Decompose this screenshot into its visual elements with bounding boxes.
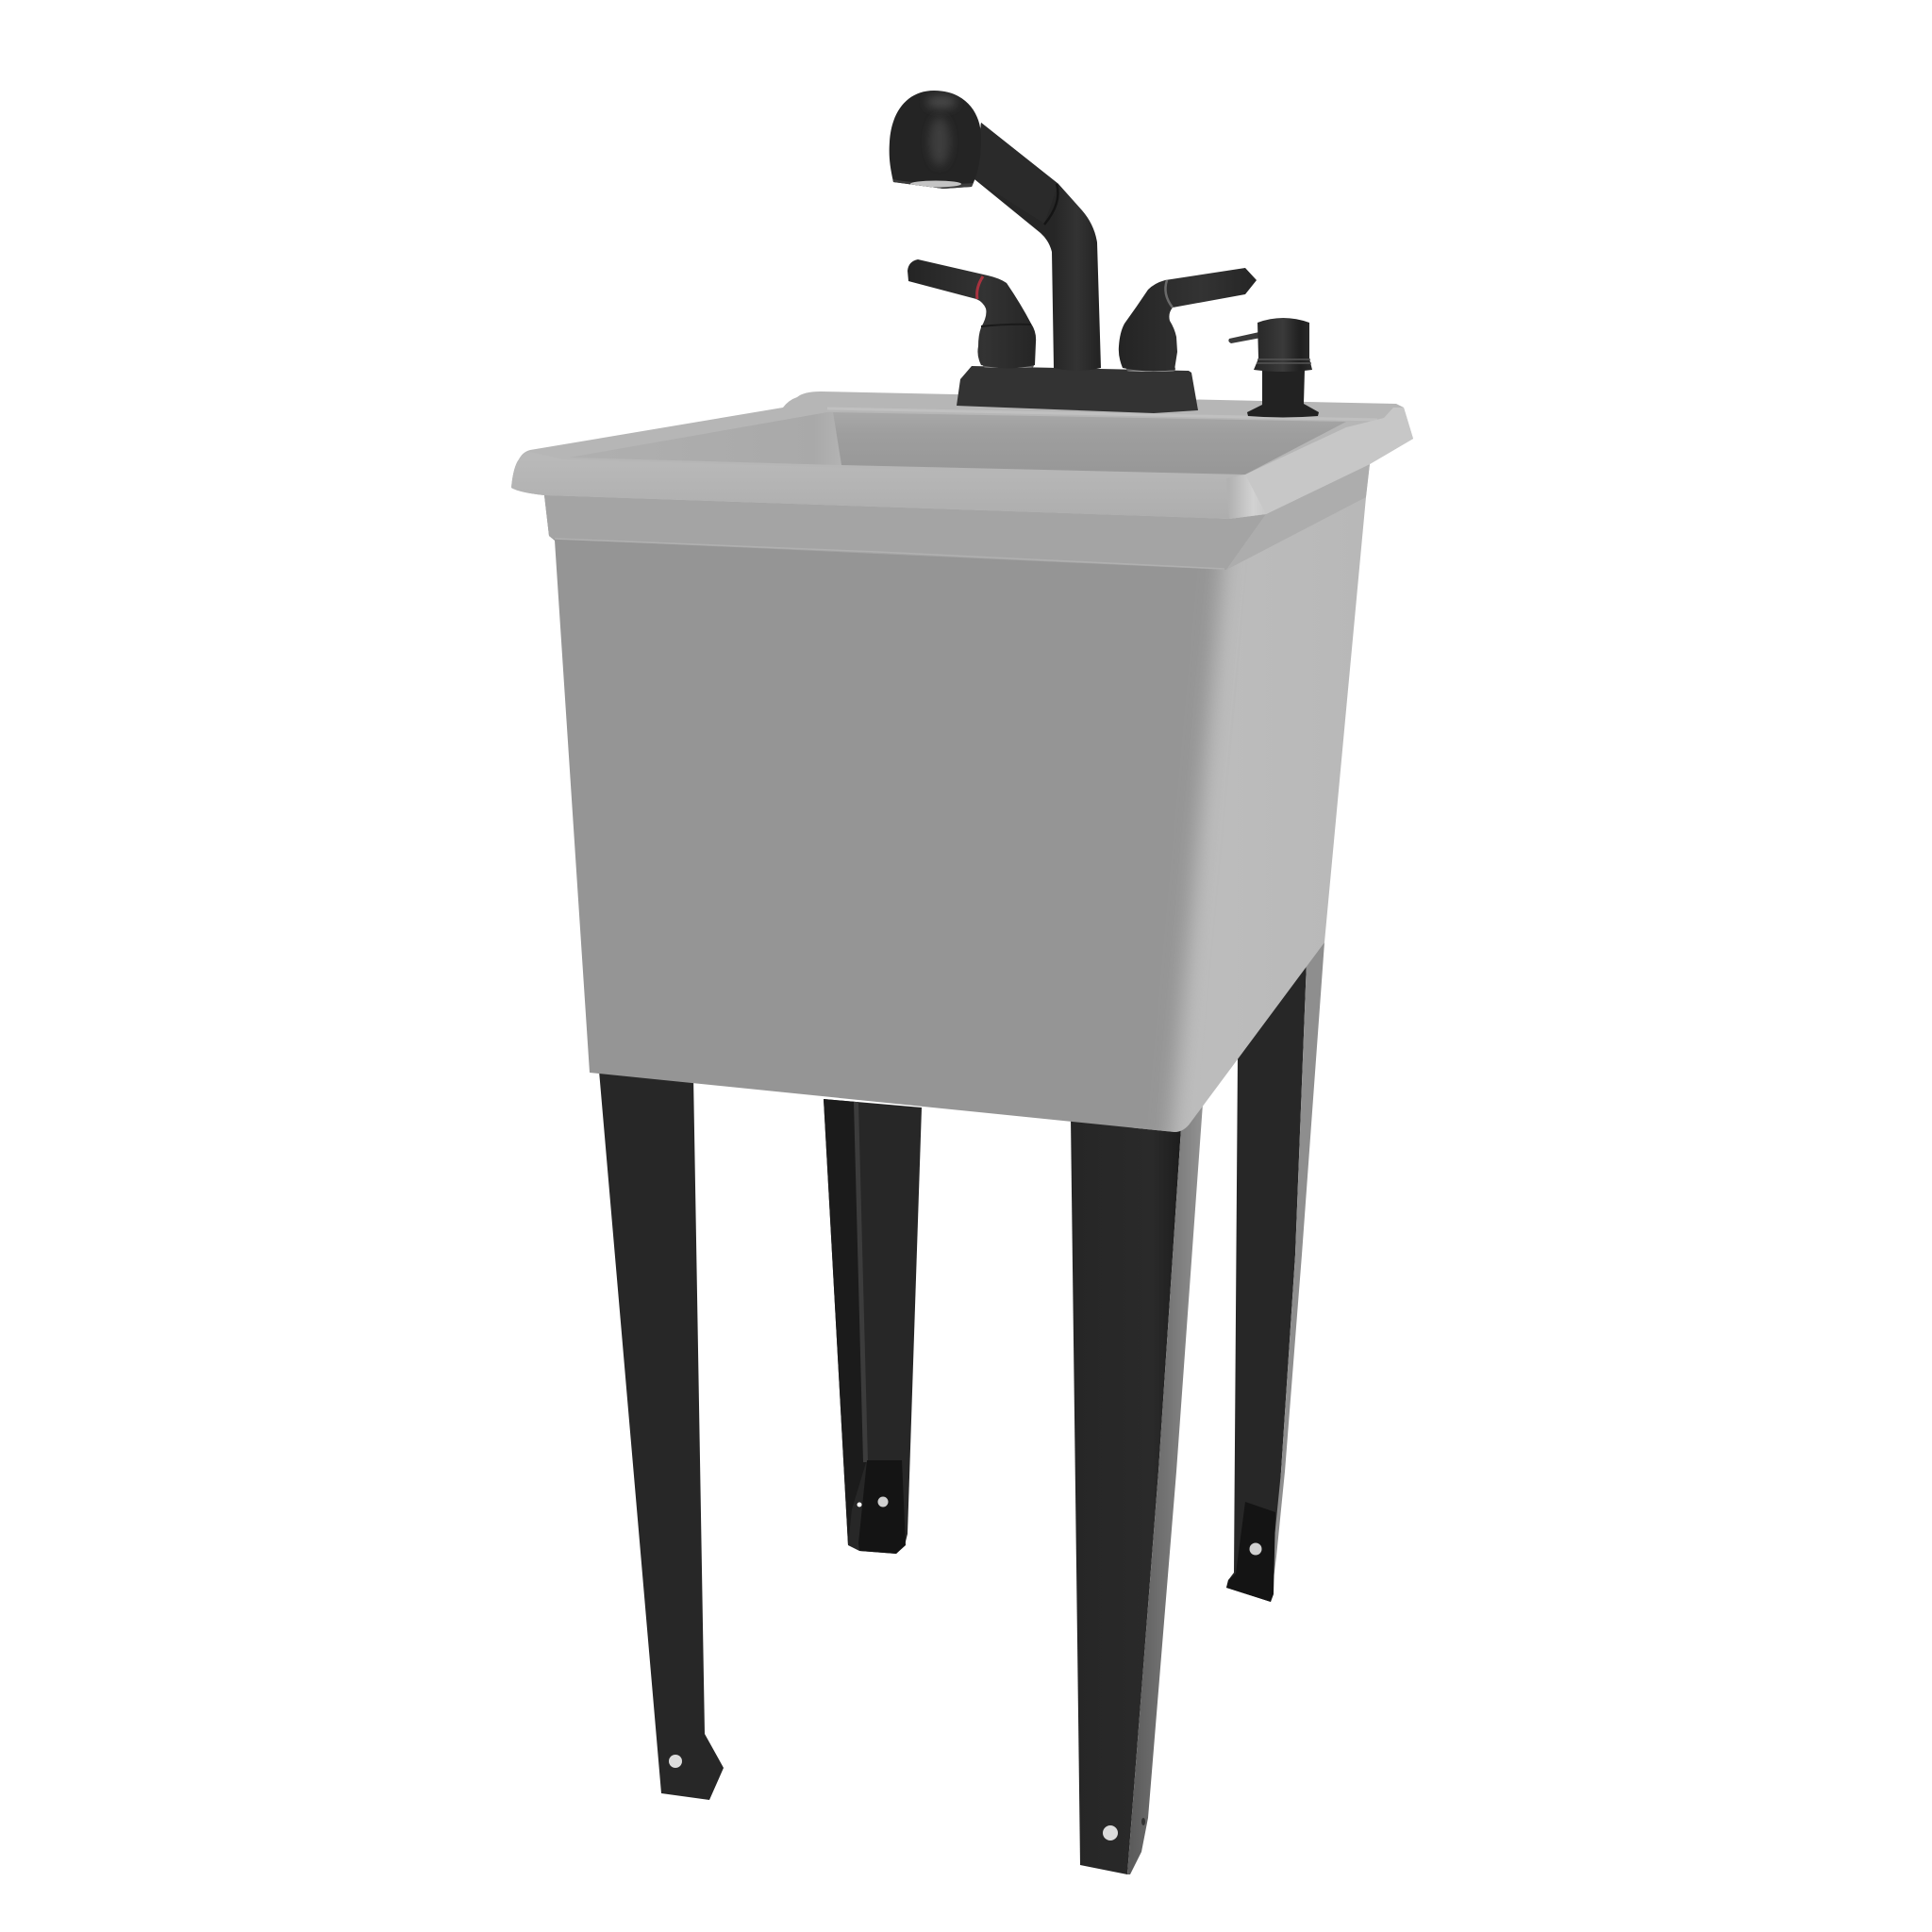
upper band below rim [538,491,1266,570]
front-right leg [1071,1104,1203,1874]
front rim [511,452,1266,519]
right face [1132,453,1377,1141]
foot bracket [858,1460,906,1554]
spout neck [974,123,1101,371]
pump spout [1228,328,1276,343]
right rim [1239,408,1413,514]
basin interior: back wall [833,412,1346,475]
foot bracket [1226,1502,1275,1602]
screw [1103,1825,1118,1840]
spray head [889,91,981,189]
spout joint [1044,184,1058,225]
spray nozzle [892,179,974,189]
pump stem and flange [1247,370,1319,417]
right handle [1119,268,1257,372]
rim corner highlight [1226,475,1266,519]
faucet base plate [957,366,1198,413]
back-left leg [824,1099,922,1554]
back-right leg [1226,942,1324,1602]
pump body [1254,318,1312,372]
front-left leg [599,1071,724,1800]
product illustration: grey utility sink on black legs [511,91,1413,1874]
basin interior: left wall [569,412,841,465]
cold indicator [1165,280,1173,308]
screw [669,1755,682,1768]
hot indicator [977,276,983,299]
silver rings [983,362,1034,368]
basin body [544,464,1370,1132]
faucet [887,85,1257,413]
basin rim top surface and deck [511,391,1413,519]
front face [544,495,1230,1132]
left handle [908,259,1036,368]
light side strip [1271,942,1324,1602]
soap dispenser [1228,318,1319,417]
